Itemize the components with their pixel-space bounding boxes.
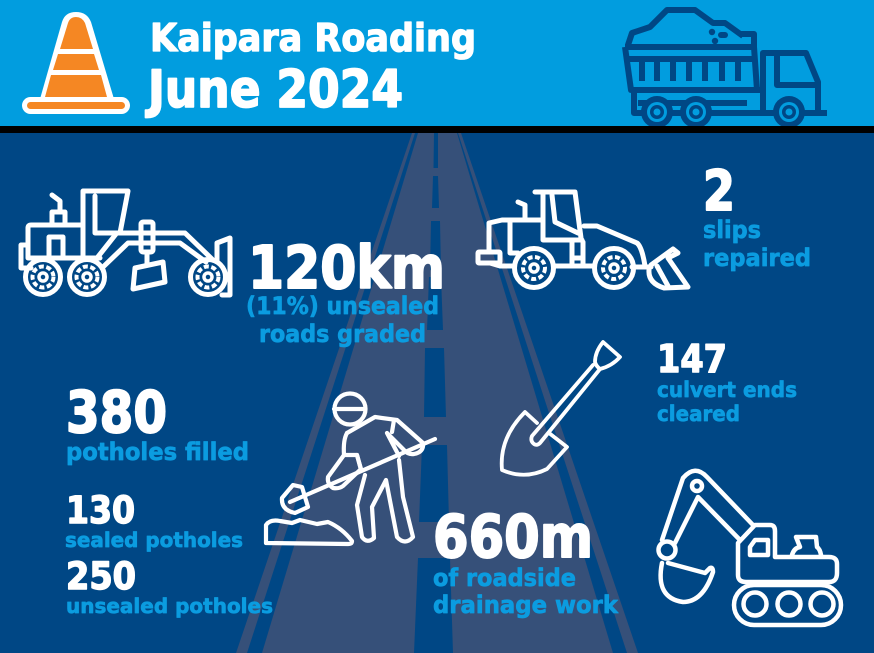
icon: worker shovelling bbox=[266, 394, 435, 544]
stat: 2 slips: repaired bbox=[703, 244, 811, 272]
stat: 130 sealed: 130 bbox=[66, 489, 135, 532]
stat: 120km graded bbox=[246, 233, 445, 348]
title bbox=[145, 16, 476, 120]
title: June 2024 bbox=[145, 60, 403, 120]
stat: 660m drainage bbox=[433, 502, 619, 619]
stat: 380 potholes: 380 bbox=[66, 380, 167, 446]
icon: shovel bbox=[502, 342, 620, 475]
stat: 250 unsealed: 250 bbox=[66, 555, 136, 598]
icon: dump truck bbox=[625, 10, 827, 128]
stat: 147 culverts: 147 bbox=[657, 337, 727, 381]
title: Kaipara Roading bbox=[150, 16, 476, 60]
stat: 120km graded: 120km bbox=[248, 233, 445, 302]
stat: 660m drainage: of roadside bbox=[433, 564, 576, 592]
stat: 2 slips bbox=[703, 159, 811, 272]
stat: 250 unsealed bbox=[66, 555, 273, 618]
icon: road grader bbox=[21, 191, 230, 295]
stat: 120km graded: roads graded bbox=[259, 320, 426, 348]
stat: 147 culverts bbox=[657, 337, 797, 426]
icon: excavator bbox=[658, 471, 841, 625]
stat: 660m drainage: 660m bbox=[433, 502, 593, 571]
stat: 250 unsealed: unsealed potholes bbox=[66, 594, 273, 618]
header rule bbox=[0, 126, 874, 133]
road illustration bbox=[236, 133, 638, 653]
stat: 130 sealed: sealed potholes bbox=[65, 528, 243, 552]
stat: 120km graded: (11%) unsealed bbox=[246, 292, 439, 320]
stat: 380 potholes: potholes filled bbox=[66, 438, 249, 466]
icon: traffic cone bbox=[22, 12, 130, 114]
stat: 2 slips: slips bbox=[703, 216, 761, 244]
stat: 660m drainage: drainage work bbox=[433, 591, 619, 619]
stat: 147 culverts: culvert ends bbox=[657, 378, 797, 402]
stat: 2 slips: 2 bbox=[703, 159, 735, 223]
header band bbox=[0, 0, 874, 127]
icon: wheel loader bbox=[478, 192, 688, 288]
stat: 147 culverts: cleared bbox=[657, 402, 740, 426]
stat: 380 potholes bbox=[66, 380, 249, 466]
stat: 130 sealed bbox=[65, 489, 243, 552]
